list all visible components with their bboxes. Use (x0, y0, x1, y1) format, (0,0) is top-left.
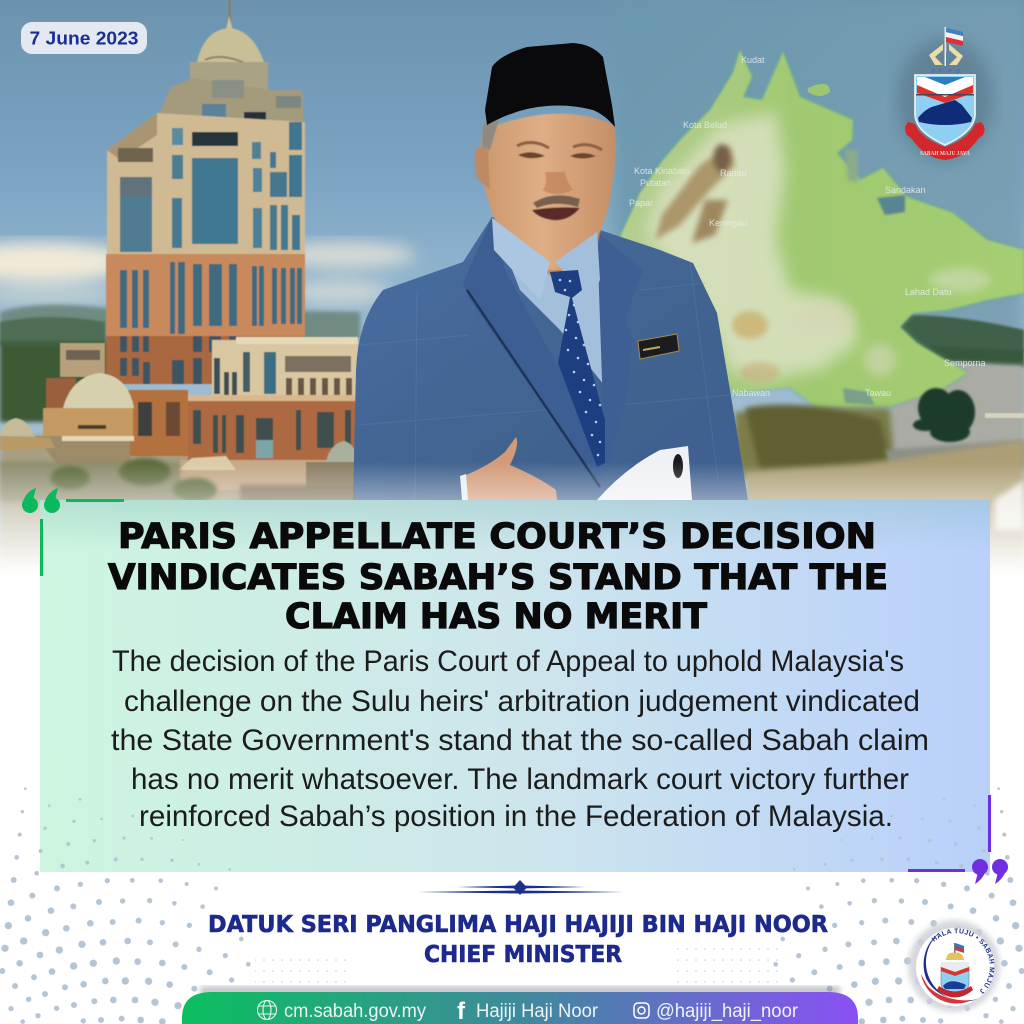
facebook (457, 998, 599, 1024)
white mask (597, 446, 692, 500)
opening quote mark (22, 488, 124, 576)
foreground landscape: trees and shore (735, 388, 1024, 580)
sleeve seam and check pattern (358, 262, 730, 500)
date badge (21, 22, 147, 54)
low left wing and domes (0, 343, 188, 465)
tower dome (190, 0, 268, 92)
body text: The decision of the Paris Court of Appeal to uphold Malaysia's (112, 645, 904, 678)
website: cm.sabah.gov.my (284, 1001, 426, 1022)
suit jacket (353, 217, 748, 500)
heading (108, 517, 888, 637)
flag (944, 27, 963, 52)
crest arms (929, 44, 963, 65)
white fade from photo into page (0, 462, 1024, 574)
ribbon (905, 122, 985, 160)
heading: VINDICATES SABAH’S STAND THAT THE (108, 558, 888, 598)
round logo: Hala Tuju Sabah Maju Jaya: HALA TUJU • SABAH MAJU JAYA (931, 928, 994, 994)
place names on map: Ranau (720, 168, 747, 178)
motto on ribbon: SABAH MAJU JAYA (920, 151, 971, 157)
shirt (492, 218, 604, 385)
photo collage background: sky and horizon (0, 0, 1024, 580)
name and title: CHIEF MINISTER (424, 942, 622, 968)
land mass (620, 50, 1024, 408)
islands (808, 84, 830, 96)
place names on map: Kudat (741, 55, 765, 65)
body text: reinforced Sabah’s position in the Federation of Malaysia. (139, 800, 893, 833)
body text: challenge on the Sulu heirs' arbitration judgement vindicated (124, 685, 920, 718)
place names on map: Sandakan (885, 185, 926, 195)
hand (462, 437, 557, 500)
name and title (208, 912, 828, 968)
neck and face (475, 114, 616, 278)
panel: quote text background (40, 500, 990, 872)
halftone dots: left (0, 787, 251, 1024)
halftone dots: right (773, 787, 1024, 1024)
background landscape: hills and river (880, 315, 1024, 470)
heading: CLAIM HAS NO MERIT (285, 597, 707, 637)
shield (915, 75, 975, 145)
fine dot patches (255, 940, 778, 991)
relief shading (645, 112, 990, 382)
heading: PARIS APPELLATE COURT’S DECISION (118, 517, 876, 557)
divider ornament (418, 880, 624, 895)
bays (877, 195, 905, 215)
sea around map (615, 0, 1024, 345)
name and title: DATUK SERI PANGLIMA HAJI HAJIJI BIN HAJI NOOR (208, 912, 828, 938)
closing quote mark (908, 795, 1008, 884)
place names on map: Kota Kinabalu (634, 166, 690, 176)
facebook: Hajiji Haji Noor (476, 1001, 599, 1022)
instagram: @hajiji_haji_noor (656, 1001, 799, 1022)
map of Sabah (620, 50, 1024, 408)
ground and trees in front of building (0, 458, 360, 503)
place names on map: Semporna (944, 358, 986, 368)
coat of arms of Sabah (897, 27, 993, 162)
date badge: 7 June 2023 (30, 28, 138, 48)
lapels (463, 217, 605, 487)
coast glow (620, 50, 1024, 408)
tower upper stage (160, 78, 305, 150)
body text (111, 645, 929, 833)
place names on map: Nabawan (732, 388, 770, 398)
name badge (638, 334, 679, 359)
collar (492, 218, 550, 300)
building: Sabah state administrative tower (0, 0, 360, 503)
place names on map: Kota Belud (683, 120, 727, 130)
place names on map: Putatan (640, 178, 671, 188)
social media bar (182, 986, 858, 1024)
place names on map: Keningau (709, 218, 747, 228)
body text: has no merit whatsoever. The landmark court victory further (131, 763, 909, 796)
place names on map: Lahad Datu (905, 287, 952, 297)
tie (550, 270, 605, 467)
place names on map: Tawau (865, 388, 891, 398)
place names on map: Papar (629, 198, 653, 208)
place names on map (629, 55, 986, 398)
tower cream stage (107, 113, 305, 256)
songkok hat (485, 43, 615, 127)
body text: the State Government's stand that the so-called Sabah claim (111, 724, 929, 757)
portrait: Chief Minister (353, 43, 748, 500)
tower brick stage (106, 254, 305, 384)
low right wing (178, 337, 360, 490)
